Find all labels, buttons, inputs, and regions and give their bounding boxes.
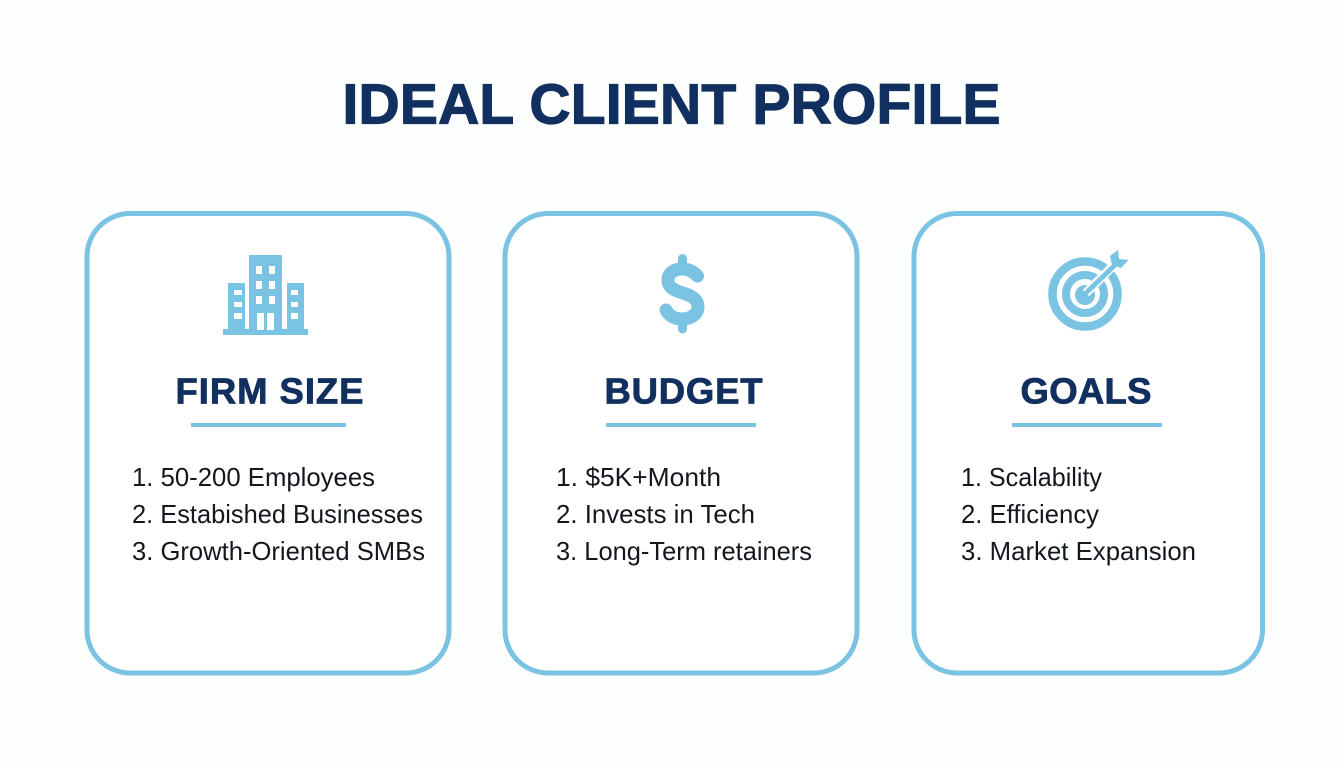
list: firm size [132,462,425,566]
card outline: budget [505,214,857,673]
icon: dollar sign [666,258,698,329]
card outline: firm size [87,214,449,673]
panel: budget [505,214,857,673]
panel: firm size [87,214,449,673]
heading underline [606,423,756,427]
list: firm size: 1. 50-200 Employees [132,462,375,492]
list: goals [961,462,1196,566]
heading: goals: GOALS [1020,370,1152,412]
list: goals: 3. Market Expansion [961,536,1196,566]
panel: goals [914,214,1262,673]
heading underline [191,423,346,427]
title: IDEAL CLIENT PROFILE [342,72,1000,136]
heading underline [1012,423,1162,427]
list: firm size: 3. Growth-Oriented SMBs [132,536,425,566]
list: firm size: 2. Estabished Businesses [132,499,423,529]
list: goals: 1. Scalability [961,462,1102,492]
icon: target with arrow [1052,250,1128,326]
heading: budget: BUDGET [604,370,762,412]
icon: office buildings [223,255,308,335]
list: budget: 3. Long-Term retainers [556,536,812,566]
list: goals: 2. Efficiency [961,499,1099,529]
list: budget [556,462,812,566]
card outline: goals [914,214,1262,673]
list: budget: 2. Invests in Tech [556,499,755,529]
list: budget: 1. $5K+Month [556,462,721,492]
heading: firm size: FIRM SIZE [176,370,364,412]
